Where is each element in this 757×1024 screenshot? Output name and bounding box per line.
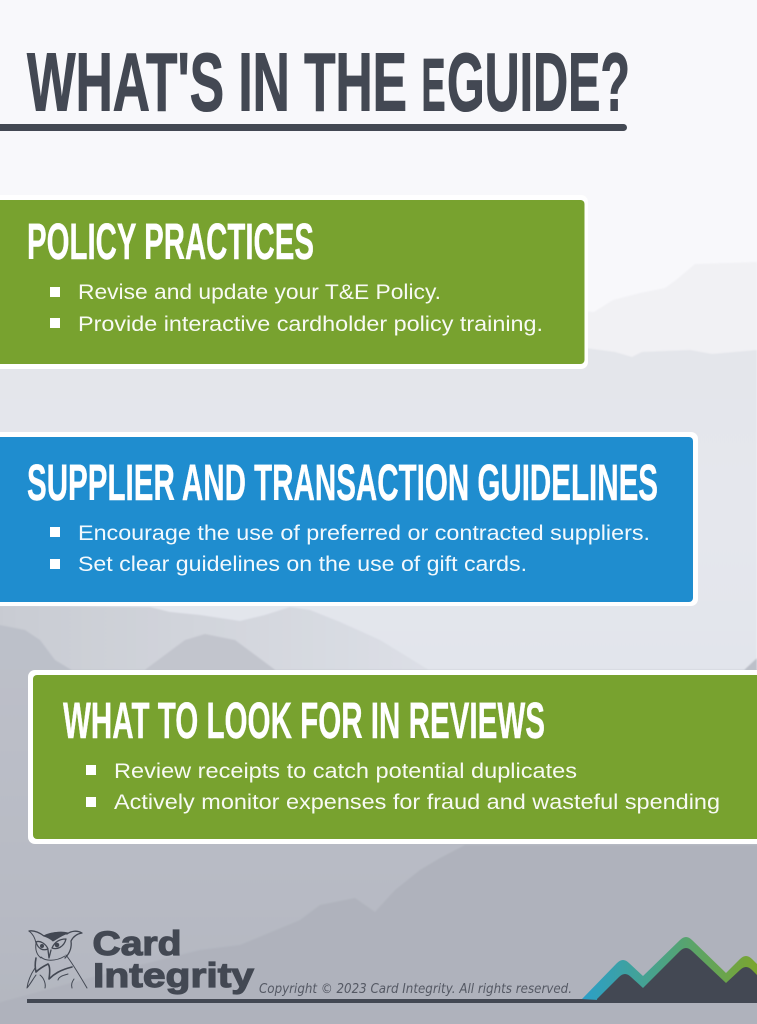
copyright notice: Copyright © 2023 Card Integrity. All rights reserved. [259,981,572,997]
bullet list: what to look for in reviews [86,759,720,814]
bullet list: policy practices [50,280,543,336]
panel: policy practices [0,195,588,369]
logo wordmark: Integrity [93,957,254,995]
bullet list: policy practices: Provide interactive cardholder policy training. [78,312,543,336]
bullet list: supplier and transaction guidelines: Encourage the use of preferred or contracted suppliers. [78,521,650,545]
heading: policy practices: POLICY PRACTICES [27,213,314,270]
bullet list: supplier and transaction guidelines [50,521,650,576]
bullet list: what to look for in reviews: Actively monitor expenses for fraud and wasteful spending [114,790,720,814]
bullet list: supplier and transaction guidelines: Set clear guidelines on the use of gift cards. [78,552,527,576]
icon: mountain logo [582,937,757,1003]
title underline [0,124,627,131]
panel: what to look for in reviews [28,670,757,844]
panel: supplier and transaction guidelines [0,432,698,606]
logo wordmark [92,925,254,995]
bullet list: what to look for in reviews: Review receipts to catch potential duplicates [114,759,577,783]
title: GUIDE? [447,36,630,128]
bullet list: policy practices: Revise and update your T&E Policy. [78,280,441,304]
logo wordmark: Card [92,925,182,963]
footer line [27,999,757,1003]
title: e [422,16,446,134]
icon: owl logo [27,931,87,988]
title: WHAT'S IN THE [27,36,407,128]
